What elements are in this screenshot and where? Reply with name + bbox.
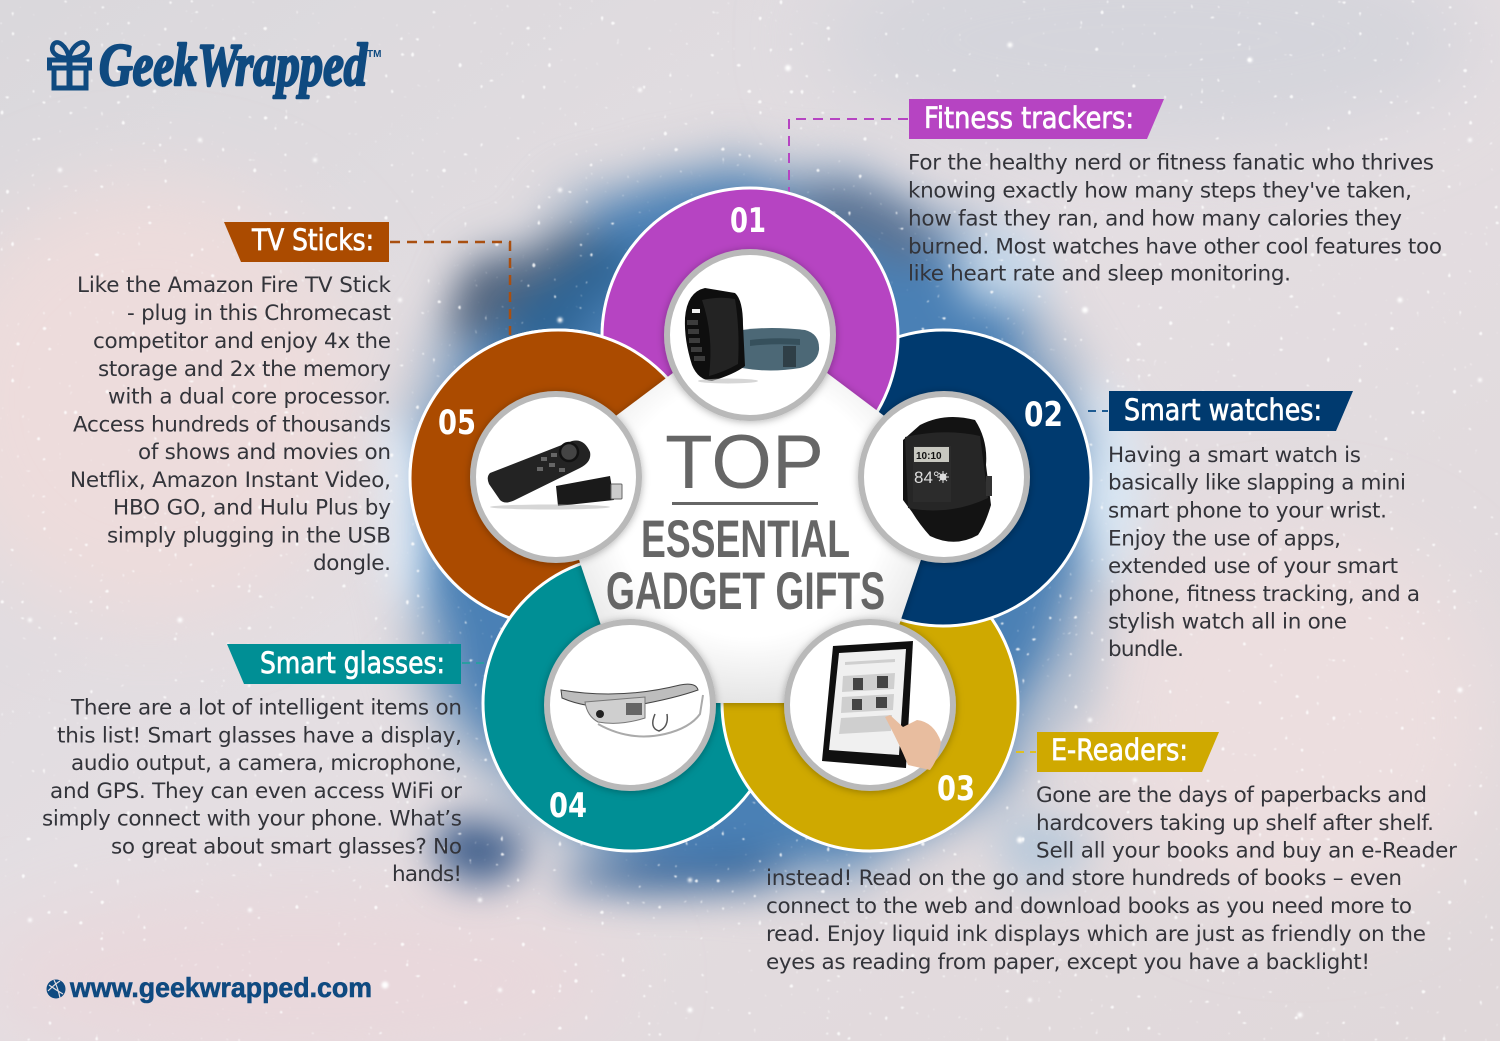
connector: smart glasses — [462, 662, 485, 664]
ring 05 orange base — [410, 330, 706, 626]
icon: globe — [46, 980, 66, 998]
body text: simply connect with your phone. What’s — [42, 806, 462, 832]
body text — [766, 783, 1457, 975]
body text: Gone are the days of paperbacks and — [1036, 783, 1427, 808]
body text — [70, 273, 392, 576]
central pentagon — [548, 315, 952, 703]
body text: instead! Read on the go and store hundreds of books – even — [766, 866, 1402, 891]
ring 05 orange overlap — [408, 328, 668, 480]
panel: smart watches — [1108, 391, 1420, 662]
website footer — [46, 972, 372, 1003]
body text: Having a smart watch is — [1108, 443, 1361, 468]
body text: For the healthy nerd or fitness fanatic who thrives — [908, 150, 1434, 176]
body text: with a dual core processor. — [108, 384, 391, 410]
body text: bundle. — [1108, 637, 1184, 662]
body text: smart phone to your wrist. — [1108, 498, 1387, 524]
connector: e-readers — [1016, 751, 1036, 753]
number 03: 03 — [937, 769, 975, 809]
number 05: 05 — [438, 403, 476, 443]
body text — [908, 150, 1442, 286]
body text: Enjoy the use of apps, — [1108, 526, 1341, 552]
body text: hardcovers taking up shelf after shelf. — [1036, 811, 1434, 836]
website address: www.geekwrapped.com — [69, 972, 372, 1003]
body text: audio output, a camera, microphone, — [71, 751, 462, 776]
icon: gift box — [50, 42, 90, 88]
body text — [42, 696, 462, 887]
body text: HBO GO, and Hulu Plus by — [113, 496, 391, 520]
trademark: TM — [367, 49, 381, 60]
panel: TV sticks — [70, 222, 392, 576]
heading banner — [909, 99, 1164, 139]
ring 03 gold — [722, 555, 1018, 851]
circle: TV stick and remote — [473, 394, 639, 560]
body text: Access hundreds of thousands — [73, 412, 391, 438]
ring 04 teal — [483, 555, 779, 851]
circle: smart watch: 10:10 — [916, 451, 942, 462]
body text: burned. Most watches have other cool features too — [908, 234, 1442, 260]
body text: how fast they ran, and how many calories they — [908, 206, 1402, 232]
body text: basically like slapping a mini — [1108, 470, 1406, 496]
body text: competitor and enjoy 4x the — [93, 329, 391, 354]
body text: read. Enjoy liquid ink displays which are just as friendly on the — [766, 922, 1426, 947]
circle: e-reader — [787, 622, 953, 788]
body text: Like the Amazon Fire TV Stick — [77, 273, 392, 298]
heading banner — [1037, 732, 1219, 772]
heading: E-Readers: — [1051, 733, 1188, 767]
ring 02 navy — [795, 330, 1091, 626]
wheel of five gadget rings — [410, 188, 1091, 851]
circle: fitness band — [667, 252, 833, 418]
title: GADGET GIFTS — [606, 562, 885, 621]
connector: TV sticks — [390, 242, 510, 335]
title: TOP — [665, 420, 824, 505]
number 02: 02 — [1024, 395, 1063, 435]
body text: dongle. — [313, 551, 391, 576]
body text: of shows and movies on — [138, 440, 391, 465]
body text: like heart rate and sleep monitoring. — [908, 262, 1291, 286]
heading banner — [224, 222, 389, 262]
body text: this list! Smart glasses have a display, — [57, 724, 462, 748]
heading banner — [1109, 391, 1353, 431]
body text: Sell all your books and buy an e-Reader — [1036, 838, 1457, 864]
panel: smart glasses — [42, 644, 462, 887]
body text: stylish watch all in one — [1108, 610, 1347, 634]
heading: Smart glasses: — [260, 646, 445, 680]
circle: smart glasses — [547, 622, 713, 788]
body text: simply plugging in the USB — [107, 524, 391, 548]
body text: so great about smart glasses? No — [111, 834, 462, 860]
body text: - plug in this Chromecast — [127, 301, 391, 326]
number 01: 01 — [730, 201, 766, 241]
logo wordmark: GeekWrapped — [99, 32, 368, 98]
body text — [1108, 443, 1420, 662]
body text: Netflix, Amazon Instant Video, — [70, 468, 391, 493]
body text: eyes as reading from paper, except you have a backlight! — [766, 950, 1370, 975]
title — [606, 420, 885, 621]
connector: fitness trackers — [789, 119, 908, 192]
panel: e-readers — [766, 732, 1457, 975]
heading: Fitness trackers: — [924, 101, 1134, 135]
body text: storage and 2x the memory — [98, 357, 391, 382]
circle: smart watch — [861, 394, 1027, 560]
body text: phone, fitness tracking, and a — [1108, 582, 1420, 607]
body text: and GPS. They can even access WiFi or — [50, 779, 462, 804]
panel: fitness trackers — [908, 99, 1442, 286]
circle: smart watch: 84° — [914, 468, 940, 487]
connector: smart watches — [1088, 410, 1108, 412]
ring 01 purple — [602, 188, 898, 484]
logo — [50, 32, 381, 98]
body text: hands! — [392, 862, 462, 887]
body text: knowing exactly how many steps they've taken, — [908, 178, 1412, 204]
body text: There are a lot of intelligent items on — [70, 696, 462, 720]
number 04: 04 — [549, 786, 587, 826]
heading banner — [227, 644, 461, 684]
body text: extended use of your smart — [1108, 554, 1398, 579]
title: ESSENTIAL — [641, 510, 850, 569]
heading: TV Sticks: — [251, 223, 374, 257]
heading: Smart watches: — [1124, 393, 1322, 427]
body text: connect to the web and download books as you need more to — [766, 894, 1412, 919]
